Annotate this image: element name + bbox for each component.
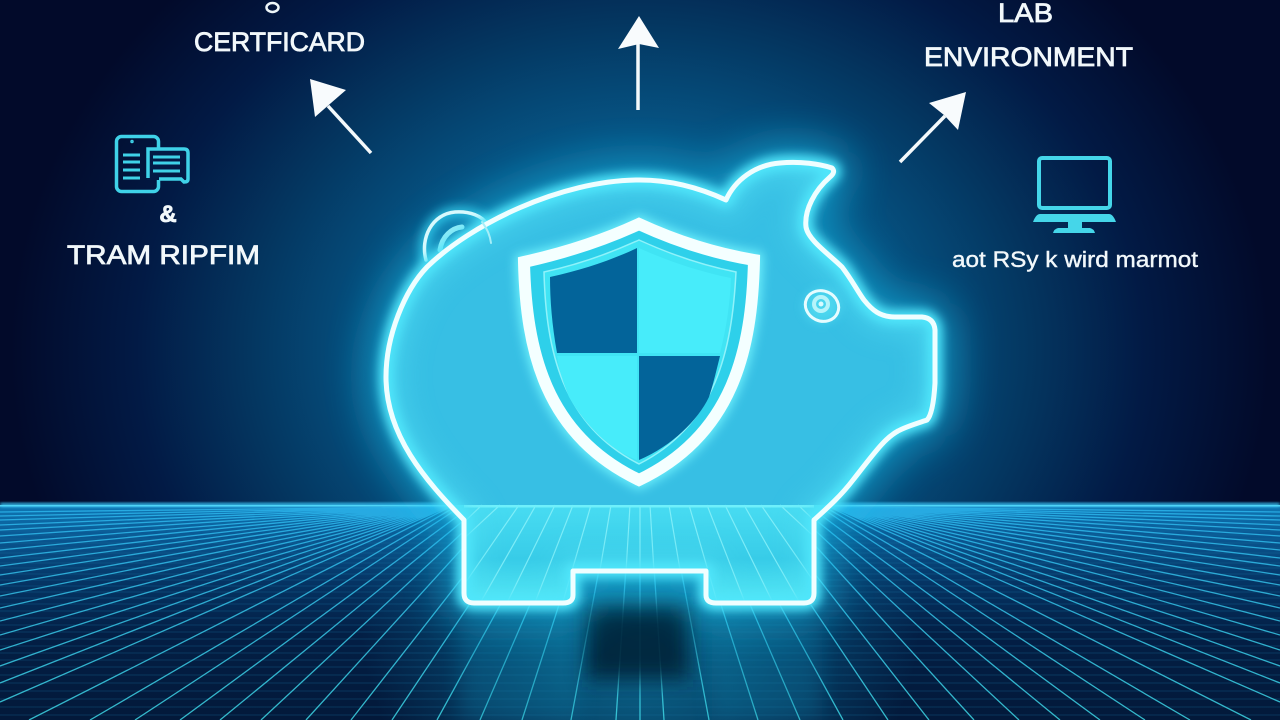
pig tail [424,212,487,260]
label: certificate: CERTFICARD [194,27,365,57]
arrow: upper left [310,79,371,153]
shield quarter: dark top left [550,248,637,353]
pig eye [800,285,844,327]
pig body fill [380,150,950,605]
grid seen through pig [466,504,812,599]
label: certificate [194,3,365,57]
floor reflection under pig [460,604,822,720]
pig outline [386,162,935,603]
icon: monitor [1033,158,1116,233]
shield quarter: light bottom left [557,356,637,460]
label: team program: & [159,201,177,228]
icon: documents [116,136,188,192]
arrow: upper right [900,92,966,162]
label: team program: TRAM RIPFIM [67,240,260,270]
shield quarter: light top right [639,248,731,353]
perspective grid floor [0,503,1280,720]
label: lab environment [924,0,1133,72]
piggy bank [380,150,950,605]
label: lab environment: ENVIRONMENT [924,42,1133,72]
shield [524,224,754,480]
shield quarter: dark bottom right [639,356,720,460]
pig glow [386,162,935,603]
arrow: up [618,16,659,110]
label: team program [67,201,260,270]
label: monitor caption: aot RSy k wird marmot [952,247,1198,272]
